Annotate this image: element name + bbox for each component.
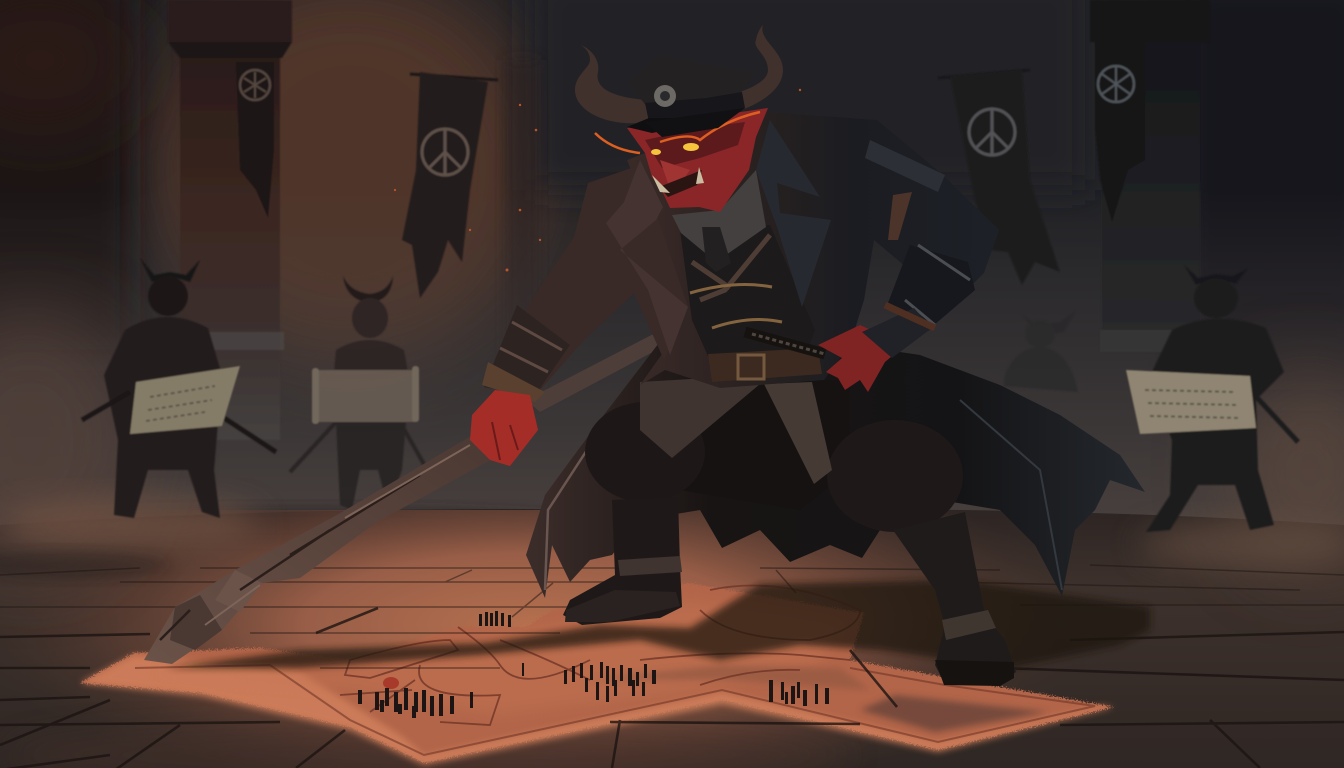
- faint samurai right: [1004, 310, 1078, 392]
- officer cap: [627, 55, 756, 137]
- belt: [708, 348, 822, 382]
- shoulder straps: [865, 140, 945, 192]
- sword hilt: [745, 332, 825, 354]
- dark tile patches inside map: [860, 695, 1048, 732]
- shirt: [672, 170, 766, 262]
- vest straps and clasps: [692, 235, 770, 300]
- horns: [575, 25, 783, 123]
- hanging banner left: [402, 72, 498, 298]
- left leg and boot: [563, 402, 705, 625]
- soldier group right: [769, 680, 829, 706]
- embers: [394, 89, 801, 272]
- right gauntlet: [888, 245, 975, 325]
- floor: [0, 509, 1344, 768]
- necktie: [702, 227, 731, 272]
- staff: [144, 328, 668, 664]
- banner on left pillar: [236, 62, 274, 218]
- right leg and boot: [827, 420, 1016, 686]
- soldier group top: [479, 611, 511, 627]
- samurai far left with scroll: [82, 258, 276, 518]
- torso coat: [482, 112, 999, 402]
- left cuff: [484, 305, 570, 397]
- mouth with fangs: [659, 170, 702, 197]
- banner on right pillar: [1095, 42, 1145, 222]
- scroll: [1126, 370, 1256, 434]
- scroll: [316, 370, 416, 422]
- back wall: [0, 0, 1344, 540]
- tiny soldiers on map: [358, 611, 829, 718]
- figure shadow on floor: [165, 580, 1150, 668]
- fire trail: [595, 112, 760, 153]
- drawn map lines: [340, 586, 860, 725]
- samurai far right with scroll: [1126, 265, 1298, 532]
- pelvis between legs: [670, 380, 850, 510]
- soldier group left: [358, 688, 473, 718]
- scroll: [130, 366, 240, 434]
- left arm: [484, 165, 688, 397]
- glowing eyes: [651, 143, 699, 155]
- coat tail back: [526, 335, 1145, 598]
- hanging banner right: [938, 70, 1060, 285]
- vest: [680, 225, 815, 372]
- left lapel: [606, 160, 688, 355]
- head: [595, 108, 768, 212]
- right red hand: [818, 305, 935, 392]
- oni commander: [470, 25, 1145, 686]
- coat front flaps: [640, 378, 760, 458]
- left red hand: [470, 390, 538, 466]
- sand map on floor: [80, 583, 1114, 765]
- soldier group center: [522, 662, 656, 702]
- outline groove: [135, 665, 1095, 755]
- right stone pillar: [1090, 0, 1210, 352]
- fog and dust at edges: [0, 310, 1344, 579]
- left stone pillar: [168, 0, 292, 440]
- right lapel: [756, 120, 831, 307]
- floor tile cracks: [0, 565, 1344, 768]
- face and ears: [627, 108, 768, 212]
- samurai center left with scroll: [290, 276, 425, 510]
